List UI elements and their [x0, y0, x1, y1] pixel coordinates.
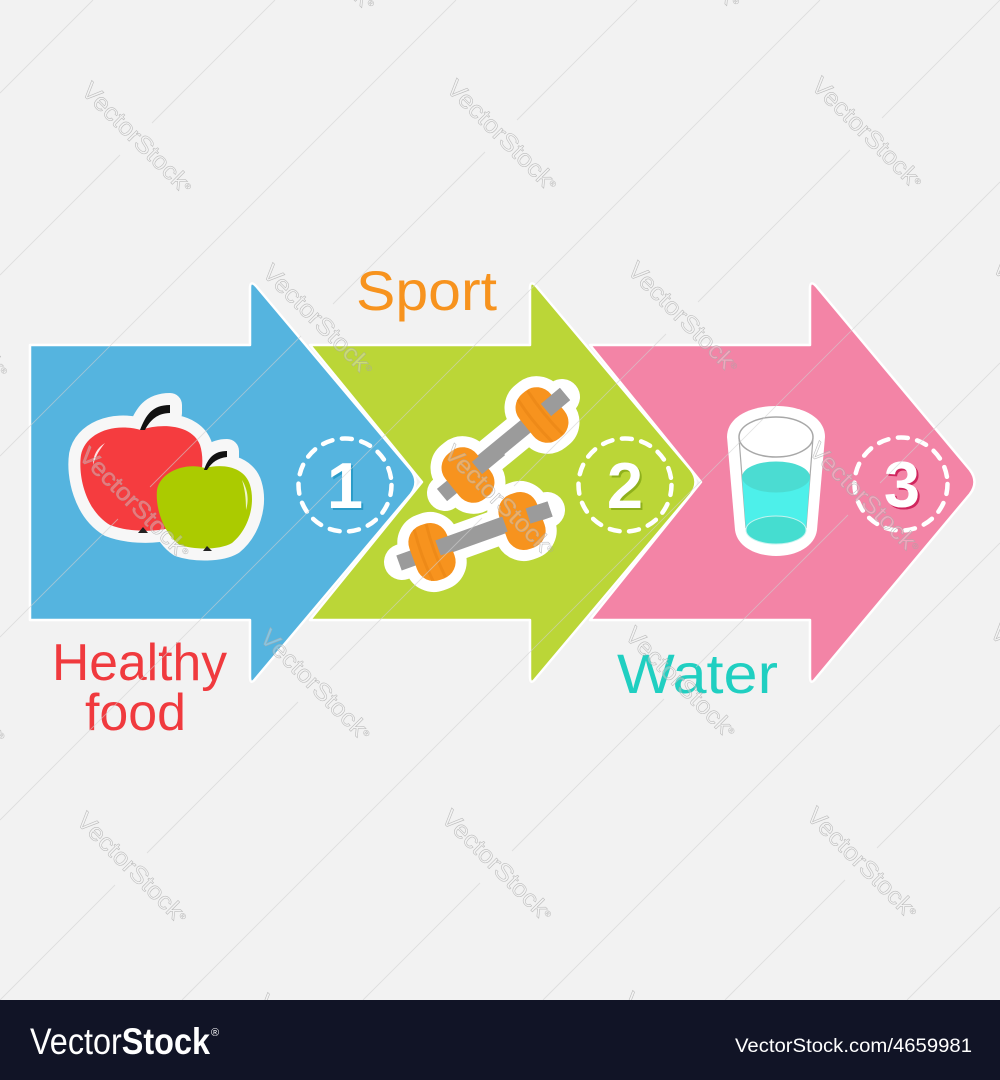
watermarks: VectorStock: [254, 624, 364, 734]
watermarks: ®: [177, 911, 188, 922]
icon: green apple: [157, 451, 252, 551]
footer registered mark: ®: [211, 1027, 219, 1039]
watermarks: ®: [910, 541, 921, 552]
watermarks: VectorStock: [441, 75, 550, 184]
watermarks: ®: [547, 178, 558, 189]
step 1 badge: 1: [327, 449, 363, 522]
watermarks: VectorStock: [257, 259, 366, 369]
watermarks: VectorStock: [622, 257, 731, 366]
watermarks: ®: [728, 360, 739, 371]
footer logo: VectorStock: [30, 1021, 210, 1062]
step 3 badge: [854, 438, 948, 530]
arrow: step 1 blue: [30, 283, 416, 682]
icon: glass of water: [727, 406, 825, 556]
arrow: step 2 green: [310, 283, 696, 682]
step 1 badge: 1: [329, 451, 365, 524]
watermarks: ®: [912, 176, 923, 187]
watermarks: ®: [361, 728, 372, 739]
footer image id: VectorStock.com/4659981: [735, 1036, 972, 1057]
footer bar: [0, 1000, 1000, 1080]
dumbbell sticker outline: [402, 380, 576, 586]
icon: apples: [80, 405, 252, 551]
apple sticker outline: [80, 405, 252, 549]
arrow: step 3 pink: [590, 283, 974, 682]
watermarks: ®: [182, 181, 193, 192]
watermarks: VectorStock: [801, 802, 910, 912]
heading: Sport: Sport: [356, 259, 497, 322]
icon: lower dumbbell: [399, 487, 551, 586]
step 3 badge: 3: [886, 450, 922, 523]
step 1 badge: [298, 438, 392, 532]
watermarks: VectorStock: [806, 72, 915, 182]
heading: Healthy food: Healthy: [52, 634, 227, 692]
watermarks: VectorStock: [73, 442, 183, 552]
watermarks: VectorStock: [619, 622, 729, 731]
watermarks: ®: [726, 725, 737, 736]
watermarks: ®: [180, 546, 191, 557]
watermarks: ®: [545, 543, 556, 554]
step 3 badge: 3: [884, 448, 920, 521]
watermarks: VectorStock: [71, 807, 180, 917]
icon: upper dumbbell: [434, 380, 576, 510]
step 2 badge: [578, 438, 672, 532]
step 2 badge: 2: [607, 449, 643, 522]
watermarks: ®: [363, 363, 374, 374]
heading: Water: Water: [617, 642, 778, 705]
watermarks: ®: [542, 908, 553, 919]
watermarks: VectorStock: [803, 437, 913, 547]
icon: dumbbells: [399, 380, 576, 586]
heading: Healthy food: [52, 634, 227, 742]
heading: Healthy food: food: [85, 684, 186, 742]
watermarks: ®: [907, 906, 918, 917]
watermarks: VectorStock: [436, 805, 545, 914]
icon: red apple: [80, 405, 202, 533]
step 2 badge: 2: [609, 451, 645, 524]
watermarks: VectorStock: [438, 440, 548, 549]
watermarks: VectorStock: [76, 77, 185, 187]
